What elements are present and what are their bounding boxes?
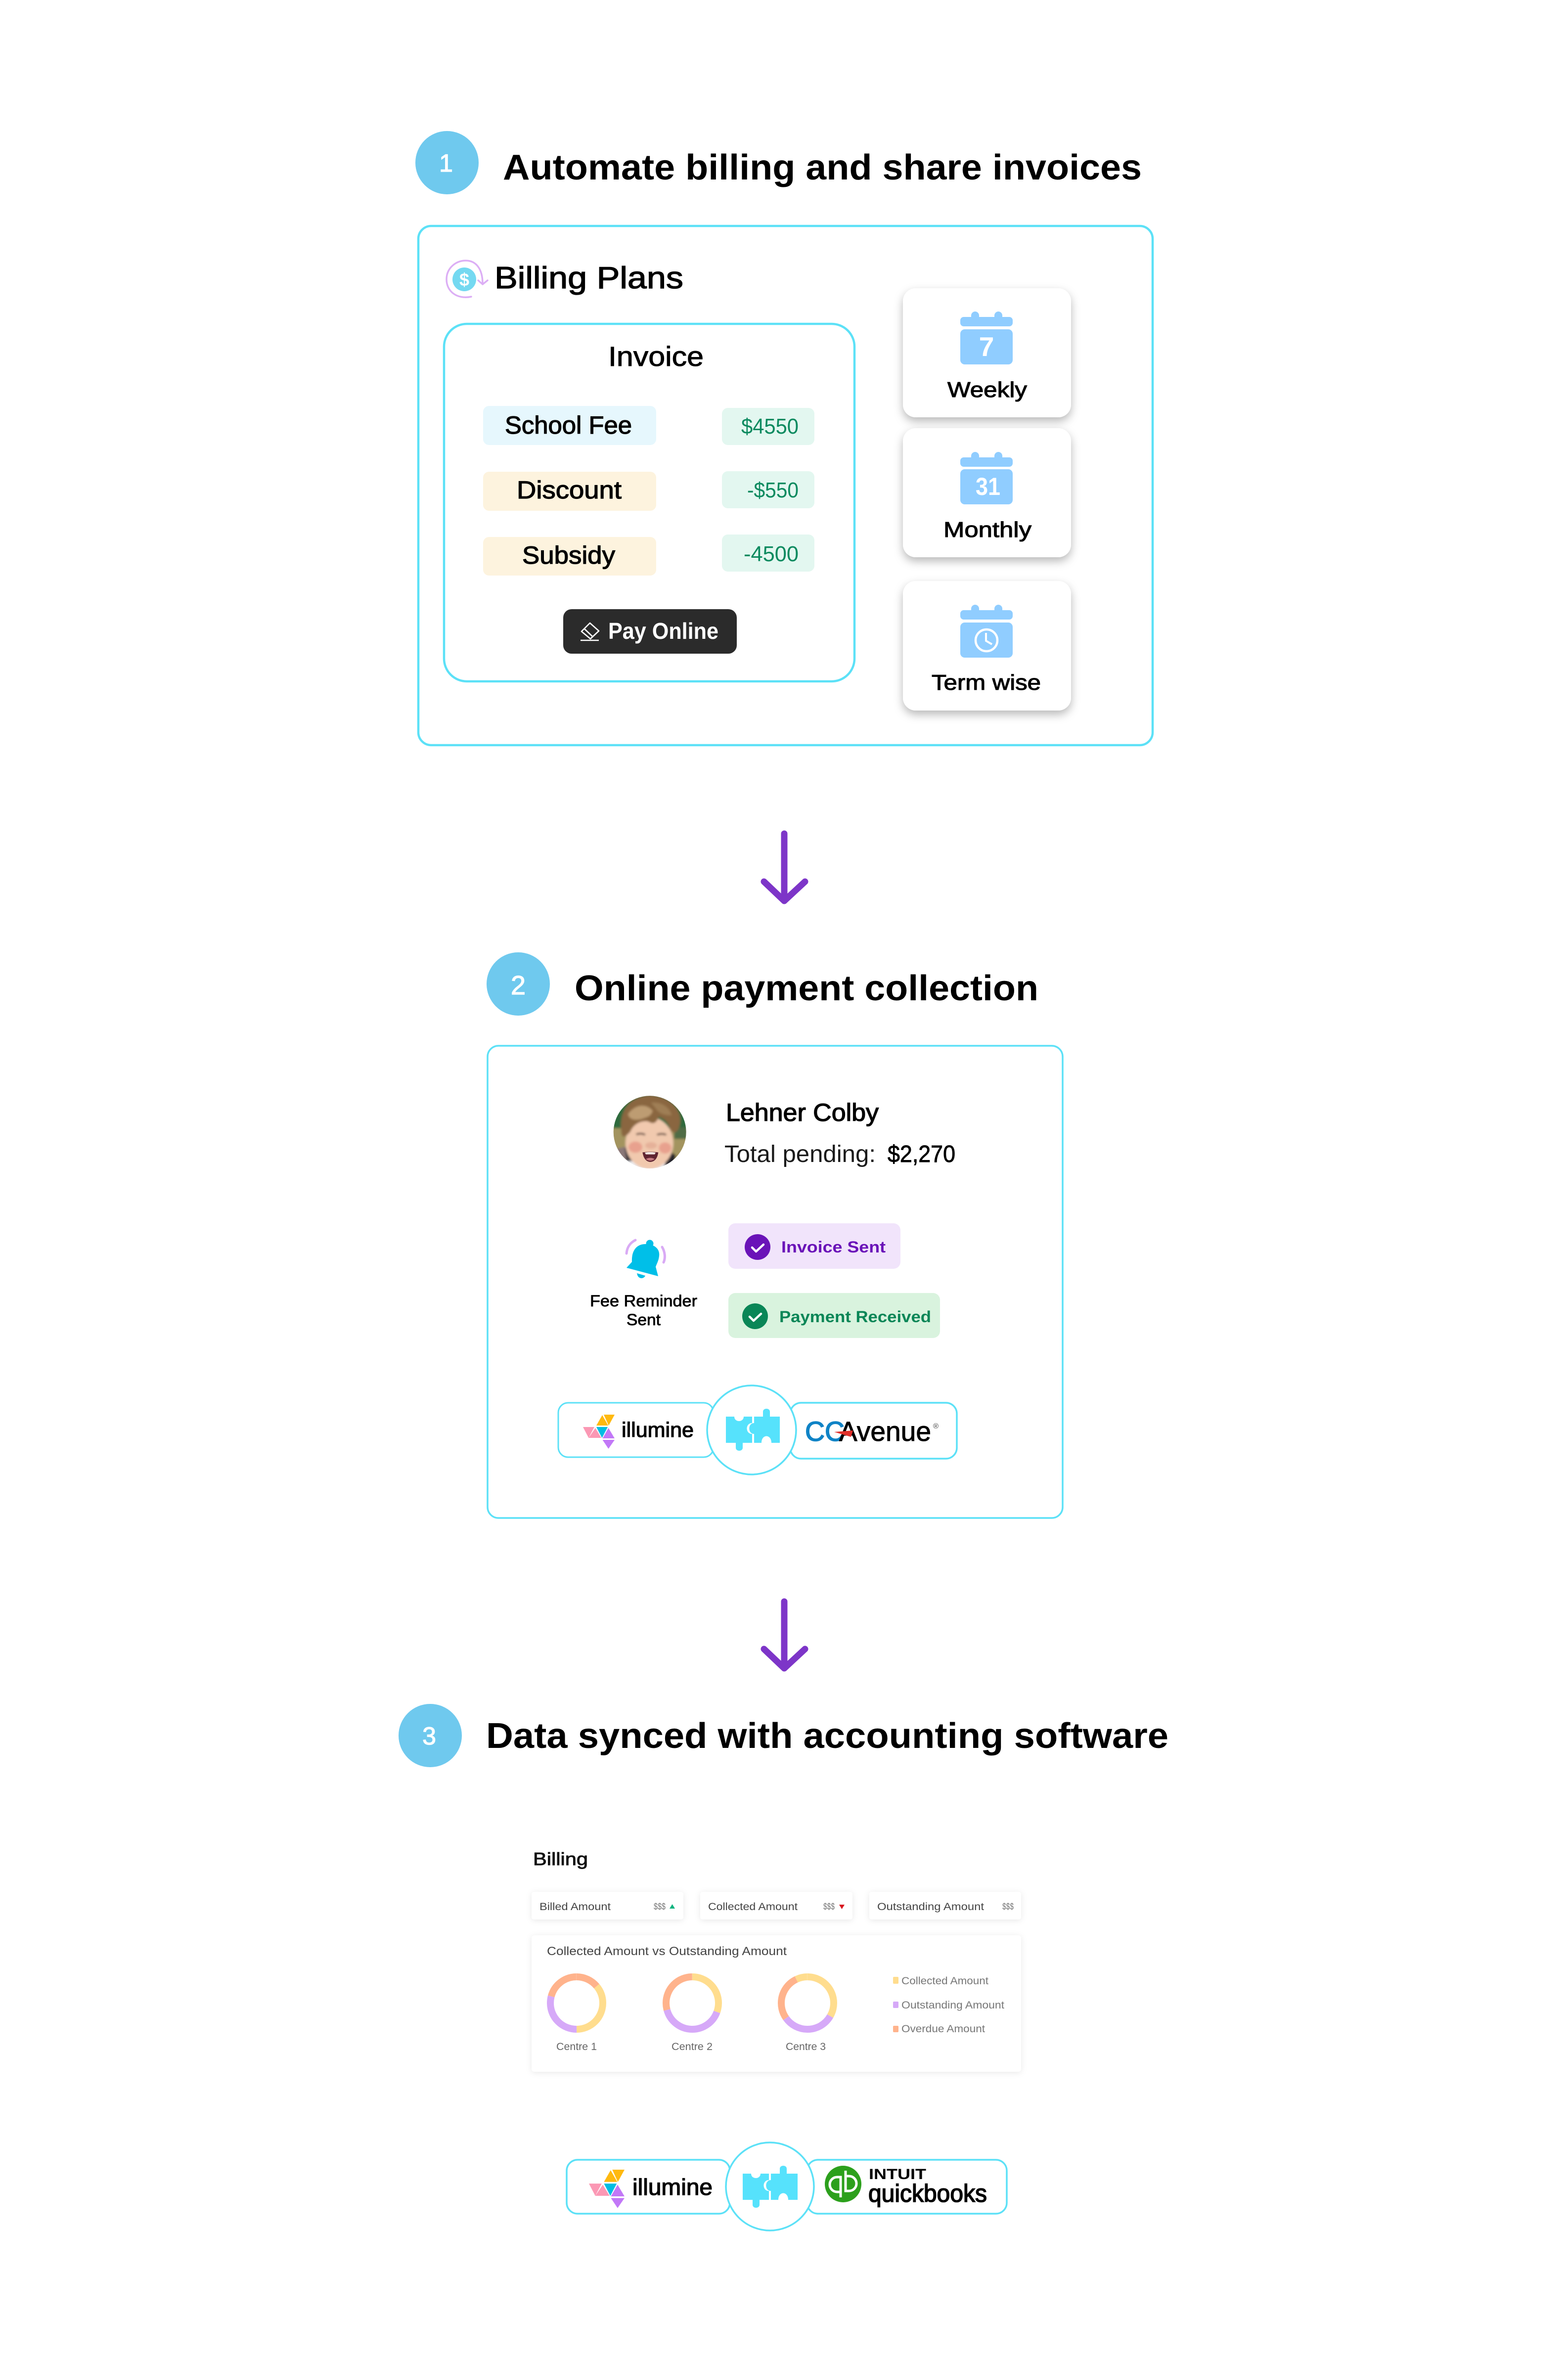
icon: puzzle xyxy=(726,1409,780,1451)
CCAvenue box xyxy=(790,1403,957,1459)
donut: centre 3: Centre 3 xyxy=(786,2041,826,2052)
fee reminder label: Sent xyxy=(627,1311,661,1329)
row: subsidy: Subsidy xyxy=(522,541,615,569)
panel: billing plans xyxy=(418,226,1153,745)
donut: centre 1: Centre 1 xyxy=(556,2041,597,2052)
donut: centre 3 xyxy=(781,1977,834,2052)
CCAvenue wordmark xyxy=(805,1416,939,1447)
status: payment received xyxy=(728,1293,940,1338)
legend xyxy=(893,1975,1004,2035)
panel: online payment xyxy=(488,1046,1063,1518)
stat: billed amount: $$$ xyxy=(654,1902,666,1912)
step 1 badge: 1 xyxy=(439,149,453,177)
stat: outstanding amount: $$$ xyxy=(1002,1902,1014,1912)
icon: calendar 7 xyxy=(960,312,1013,364)
panel: invoice xyxy=(444,324,854,681)
step 2 heading: Online payment collection xyxy=(575,969,1038,1008)
icon: recurring dollar: $ xyxy=(459,269,469,290)
QuickBooks box xyxy=(807,2160,1007,2214)
illumine wordmark: illumine xyxy=(622,1418,694,1441)
billing dashboard xyxy=(532,1849,1021,2072)
card: weekly xyxy=(903,288,1071,417)
status: payment received: Payment Received xyxy=(779,1308,931,1326)
row: discount xyxy=(483,471,814,511)
icon: bell xyxy=(627,1240,665,1278)
chart title: Collected Amount vs Outstanding Amount xyxy=(547,1945,787,1958)
CCAvenue wordmark: CC xyxy=(805,1416,845,1447)
illumine logo xyxy=(583,1415,615,1449)
step 2 badge xyxy=(487,952,550,1016)
QuickBooks logo xyxy=(825,2166,861,2202)
stat: outstanding amount xyxy=(869,1892,1021,1919)
card: term wise: Term wise xyxy=(932,670,1041,695)
stat: outstanding amount: Outstanding Amount xyxy=(877,1901,984,1913)
total pending: $2,270 xyxy=(888,1141,955,1167)
donut: centre 2 xyxy=(666,1977,718,2052)
illumine logo xyxy=(589,2170,625,2208)
illumine box xyxy=(567,2160,730,2214)
button: pay online: Pay Online xyxy=(608,618,718,644)
row: subsidy: -4500 xyxy=(744,542,799,566)
step 3 badge xyxy=(399,1704,462,1767)
step 1 heading: Automate billing and share invoices xyxy=(503,148,1142,187)
panel: donut charts xyxy=(532,1935,1021,2072)
arrow: step 2 to step 3 xyxy=(764,1602,805,1668)
student photo xyxy=(613,1096,686,1169)
step 3 heading: Data synced with accounting software xyxy=(486,1716,1168,1756)
step 3 badge: 3 xyxy=(422,1722,436,1750)
card: monthly: Monthly xyxy=(943,518,1031,542)
legend: Collected Amount xyxy=(901,1975,988,1987)
stat: collected amount: $$$ xyxy=(823,1902,835,1912)
student name: Lehner Colby xyxy=(726,1099,879,1126)
legend: Overdue Amount xyxy=(901,2023,985,2035)
billing plans heading: Billing Plans xyxy=(494,261,683,295)
row: school fee: School Fee xyxy=(505,411,632,439)
card: weekly: Weekly xyxy=(947,378,1027,402)
status: invoice sent: Invoice Sent xyxy=(781,1238,886,1256)
fee reminder label xyxy=(590,1292,697,1329)
row: school fee xyxy=(483,406,814,445)
stat: billed amount xyxy=(532,1892,683,1919)
icon: calendar clock xyxy=(960,605,1013,658)
stat: collected amount xyxy=(700,1892,852,1919)
invoice heading: Invoice xyxy=(608,341,704,372)
total pending: Total pending: xyxy=(724,1141,876,1167)
icon: calendar 31: 31 xyxy=(976,473,1000,500)
CCAvenue wordmark: ® xyxy=(933,1422,939,1430)
card: monthly xyxy=(903,428,1071,557)
INTUIT wordmark: INTUIT xyxy=(869,2166,926,2183)
dashboard heading: Billing xyxy=(533,1849,588,1869)
donut: centre 1 xyxy=(550,1977,603,2052)
step 2 badge: 2 xyxy=(511,971,526,1000)
integration: illumine and CCAvenue xyxy=(558,1385,957,1474)
card: term wise xyxy=(903,581,1071,711)
arrow: step 1 to step 2 xyxy=(764,834,805,901)
row: discount: -$550 xyxy=(747,478,799,502)
illumine wordmark: illumine xyxy=(632,2174,713,2200)
icon: calendar 7: 7 xyxy=(979,331,994,362)
connector circle xyxy=(707,1385,796,1474)
total pending xyxy=(724,1141,955,1167)
quickbooks wordmark: quickbooks xyxy=(868,2180,987,2207)
illumine box xyxy=(558,1403,714,1457)
step 1 badge xyxy=(415,131,479,194)
status: invoice sent xyxy=(728,1223,900,1269)
connector circle xyxy=(726,2142,814,2230)
icon: calendar 31 xyxy=(960,452,1013,504)
stat: collected amount: Collected Amount xyxy=(708,1901,798,1913)
row: school fee: $4550 xyxy=(741,414,799,439)
button: pay online xyxy=(563,609,737,654)
CCAvenue wordmark: Avenue xyxy=(839,1416,931,1447)
icon: puzzle xyxy=(743,2166,798,2208)
row: subsidy xyxy=(483,535,814,576)
fee reminder label: Fee Reminder xyxy=(590,1292,697,1310)
legend: Outstanding Amount xyxy=(901,2000,1004,2011)
integration: illumine and QuickBooks xyxy=(567,2142,1007,2230)
icon: recurring dollar xyxy=(447,261,488,297)
row: discount: Discount xyxy=(517,476,622,504)
stat: billed amount: Billed Amount xyxy=(539,1901,611,1913)
donut: centre 2: Centre 2 xyxy=(672,2041,713,2052)
